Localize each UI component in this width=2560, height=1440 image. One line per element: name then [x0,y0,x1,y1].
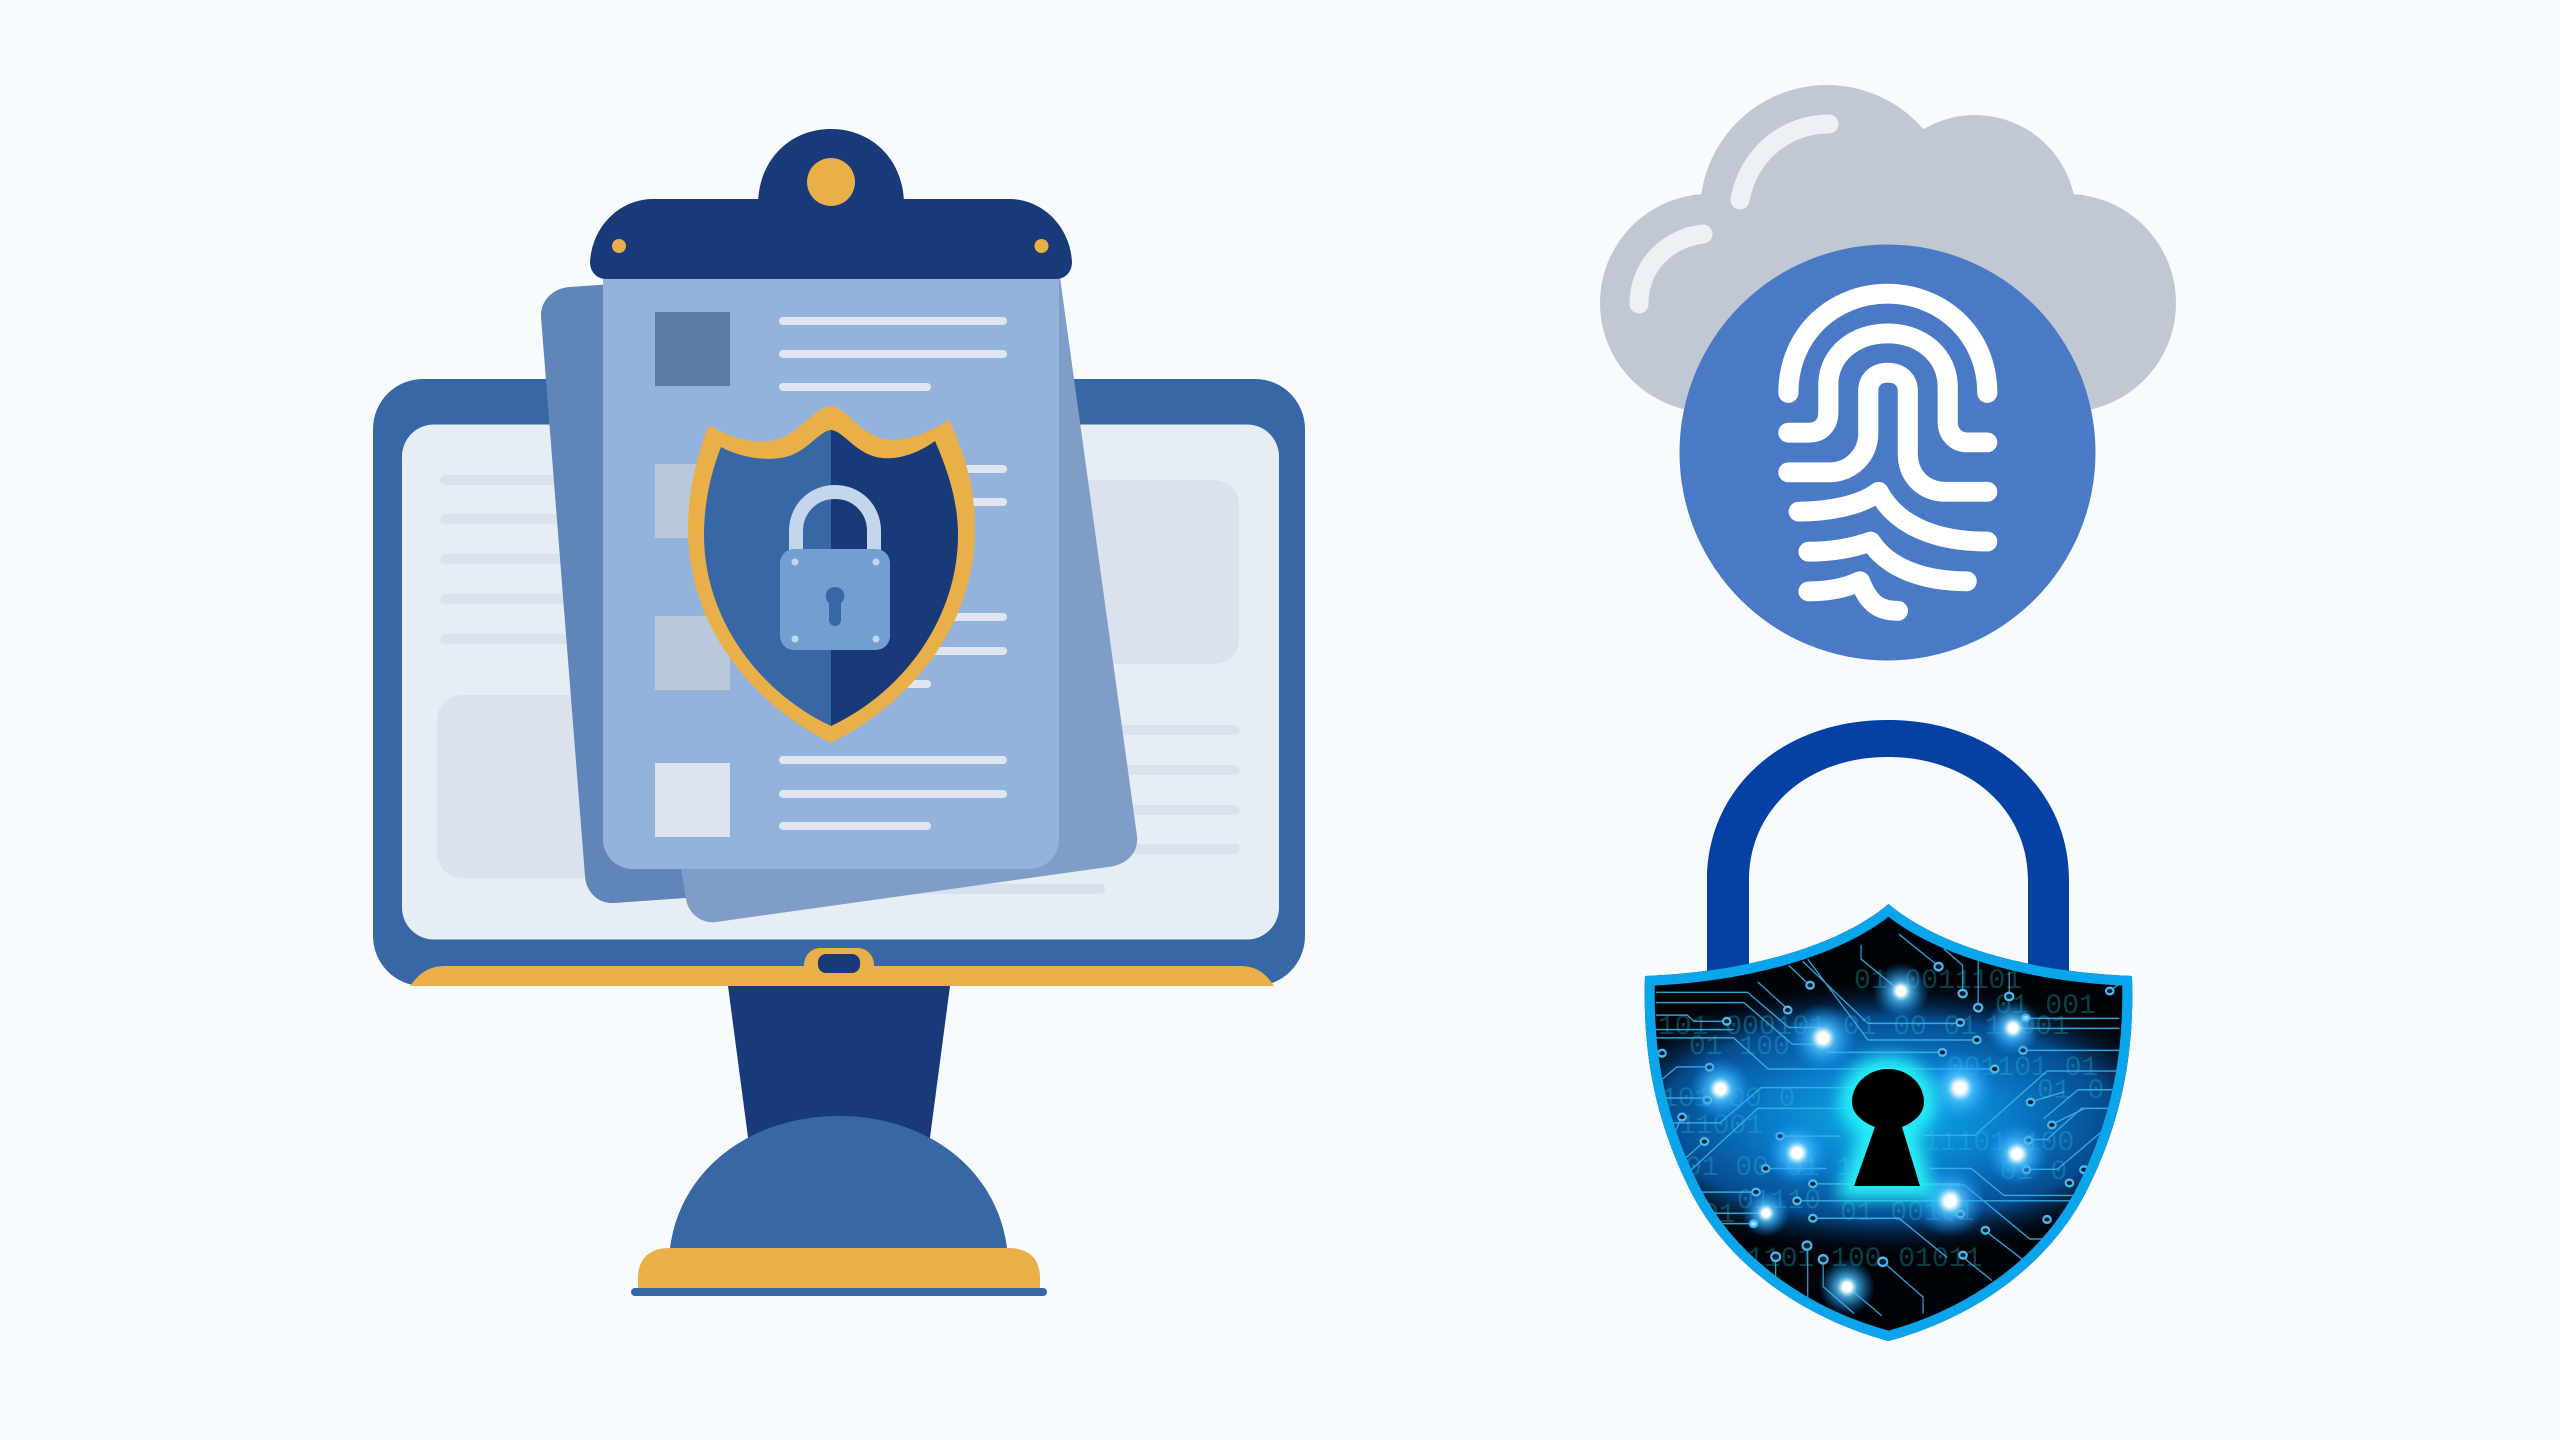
cloud highlights [1639,124,1829,304]
security shield with padlock [688,406,975,743]
sheet text lines [779,317,1007,830]
binary digits: 1 001 [1985,1012,2069,1043]
binary digits: 01 [1702,1200,1736,1231]
clipboard clip [590,129,1072,279]
binary digits: 01 001 [1995,991,2096,1022]
back sheet left [541,278,700,903]
monitor screen [402,424,1279,940]
monitor clip notch [804,948,874,973]
padlock keyhole [826,587,844,626]
monitor base gold [638,1248,1040,1288]
illustration scene [373,85,2176,1341]
circuit nodes [1658,963,2114,1266]
shield right half [831,430,958,726]
monitor neck [728,986,950,1145]
monitor foot [631,1288,1047,1296]
binary digits: 11001 [1679,1111,1763,1142]
padlock shackle [1707,720,2069,985]
binary digits: 01110 [1737,1186,1821,1217]
padlock shackle [796,492,874,555]
binary digits: 01 0 [2000,1157,2067,1188]
binary digits: 101 00 0 [1661,1084,1795,1115]
binary digits: 001101 01 [1947,1053,2098,1084]
binary digits: 01 0 [2037,1076,2104,1107]
sheet thumbnails [655,312,730,837]
padlock rivets [792,558,880,642]
binary digits: 101 000101 01 00 01 [1658,1012,1977,1043]
binary digits: 01 00101 [1840,1198,1974,1229]
computer monitor illustration [373,379,1305,1296]
circuit traces [1656,934,2119,1316]
screen placeholder content [437,475,1240,894]
binary digits: 11101 100 [1923,1128,2074,1159]
glowing sparks [1688,963,2049,1315]
monitor stand dome [670,1116,1007,1248]
binary digits: 01 00 01 1 [1685,1153,1853,1184]
cloud with fingerprint icon [1600,85,2176,660]
binary digits: 01 0011101 [1854,966,2022,997]
clipboard with document [541,129,1137,922]
keyhole glow [1852,1069,1924,1186]
binary digits: 01 100 [1689,1032,1790,1063]
back sheet right [670,270,1137,922]
fingerprint circle [1680,244,2096,660]
monitor gold bar [410,966,1274,986]
binary digits [1658,966,2104,1275]
cyber padlock [1644,720,2132,1341]
shield border [1645,904,2132,1341]
circuit shield [1644,904,2132,1341]
shield left half [704,430,831,726]
binary digits: 1101 100 01011 [1747,1244,1982,1275]
padlock body [780,549,890,650]
shield gold rim [688,406,975,743]
main sheet [603,270,1059,869]
fingerprint ridges [1788,294,1987,611]
cloud shape [1600,85,2176,412]
monitor frame [373,379,1305,986]
keyhole [1852,1069,1924,1186]
